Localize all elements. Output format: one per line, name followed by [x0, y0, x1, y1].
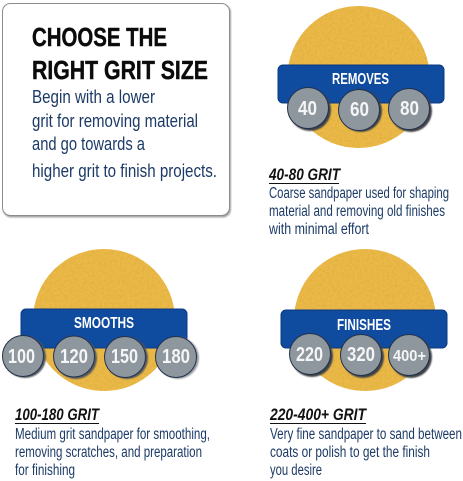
grit badge: 120: 120: [60, 345, 88, 368]
description: [268, 185, 449, 238]
grit badge: 320: [340, 334, 384, 378]
banner: smooths: [21, 309, 187, 348]
heading: CHOOSE THE: [32, 24, 167, 52]
grit badge: 150: [104, 336, 148, 379]
grit badge: 60: [338, 90, 382, 132]
grit title: 40-80 GRIT: [268, 166, 342, 184]
grit badge: 100: [2, 336, 46, 378]
description: with minimal effort: [268, 221, 370, 238]
description: removing scratches, and preparation: [15, 444, 202, 461]
grit badge: 150: 150: [111, 345, 138, 368]
banner: finishes: FINISHES: [337, 317, 391, 334]
icon: sandpaper disc: [288, 6, 430, 148]
description: you desire: [270, 462, 322, 479]
grit badge: 60: 60: [350, 98, 369, 121]
banner: smooths: SMOOTHS: [74, 315, 134, 332]
grit badge: 40: [288, 88, 331, 131]
heading: [32, 24, 208, 85]
grit badge: 180: [156, 336, 199, 379]
grit badge: 180: 180: [162, 345, 190, 368]
intro text: grit for removing material: [32, 110, 198, 131]
intro text: and go towards a: [32, 133, 146, 154]
grit badge: 120: [54, 336, 97, 379]
grit title: 100-180 GRIT: [15, 406, 101, 424]
description: for finishing: [15, 462, 75, 479]
panel: smooths 100-180 grit: [2, 249, 210, 479]
grit badge: 220: [290, 334, 333, 377]
icon: sandpaper disc: [33, 249, 175, 391]
banner: finishes: [281, 310, 447, 348]
heading: RIGHT GRIT SIZE: [32, 57, 208, 85]
panel: finishes 220-400+ grit: [269, 249, 462, 479]
grit title: 220-400+ GRIT: [269, 406, 368, 424]
grit badge: 40: 40: [298, 97, 317, 120]
panel: choose the right grit size: [2, 4, 231, 218]
banner: removes: [278, 65, 444, 103]
description: [270, 426, 462, 479]
icon: sandpaper disc: [294, 249, 436, 391]
description: Medium grit sandpaper for smoothing,: [15, 426, 210, 443]
banner: removes: REMOVES: [332, 71, 389, 88]
intro text: higher grit to finish projects.: [32, 160, 217, 181]
intro text: Begin with a lower: [32, 86, 155, 107]
grit badge: 400+: 400+: [393, 348, 426, 365]
grit badge: 100: 100: [8, 345, 35, 368]
intro text: [32, 86, 217, 181]
grit badge: 400+: [388, 334, 432, 378]
description: [15, 426, 210, 479]
grit badge: 80: 80: [400, 97, 419, 120]
panel: removes 40-80 grit: [268, 6, 449, 238]
grit badge: 320: 320: [347, 343, 375, 366]
grit badge: 80: [388, 88, 432, 132]
grit badge: 220: 220: [296, 343, 323, 366]
